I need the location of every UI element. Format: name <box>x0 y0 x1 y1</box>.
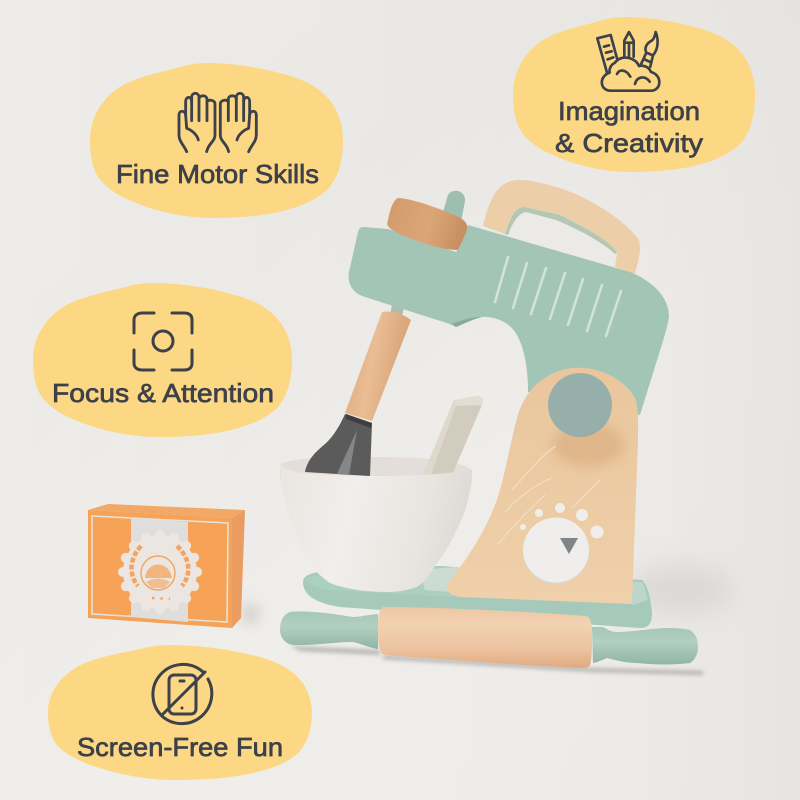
product: toy mixer <box>280 180 698 668</box>
dial dots <box>520 503 604 538</box>
badge: Fine Motor Skills <box>90 63 343 218</box>
bowl interior <box>280 457 472 480</box>
base plate <box>303 566 652 628</box>
box seal <box>123 535 197 609</box>
bowl body <box>280 463 472 592</box>
arm underside <box>451 317 482 327</box>
badge: Imagination & Creativity <box>513 17 755 172</box>
label: Screen-Free Fun <box>77 732 283 762</box>
icon: open hands <box>179 93 256 152</box>
label: Imagination <box>558 96 700 126</box>
mixer stand <box>447 368 638 604</box>
badge: Focus & Attention <box>33 283 292 437</box>
blue knob <box>548 373 612 437</box>
icon: ruler, pencil and brush in cloud <box>597 32 659 91</box>
label: Fine Motor Skills <box>116 159 319 189</box>
mixer arm <box>349 225 669 415</box>
flat beater <box>423 396 483 475</box>
spatula head <box>305 414 372 476</box>
icon: focus frame <box>134 313 192 370</box>
label: Focus & Attention <box>52 378 274 408</box>
rolling pin <box>280 607 698 668</box>
badge: Screen-Free Fun <box>48 645 312 780</box>
mixer handle <box>483 180 640 274</box>
dial <box>523 518 589 584</box>
mixer peg <box>442 191 465 222</box>
icon: no phone <box>153 664 212 724</box>
arm vent lines <box>495 257 621 336</box>
soft shadows on the table <box>240 566 735 675</box>
mixer pulley <box>387 198 467 250</box>
bowl <box>280 396 483 592</box>
product: orange box <box>88 504 245 628</box>
beater stem <box>345 305 411 421</box>
stand grain and knob shadow <box>497 423 624 545</box>
label: & Creativity <box>555 128 703 158</box>
